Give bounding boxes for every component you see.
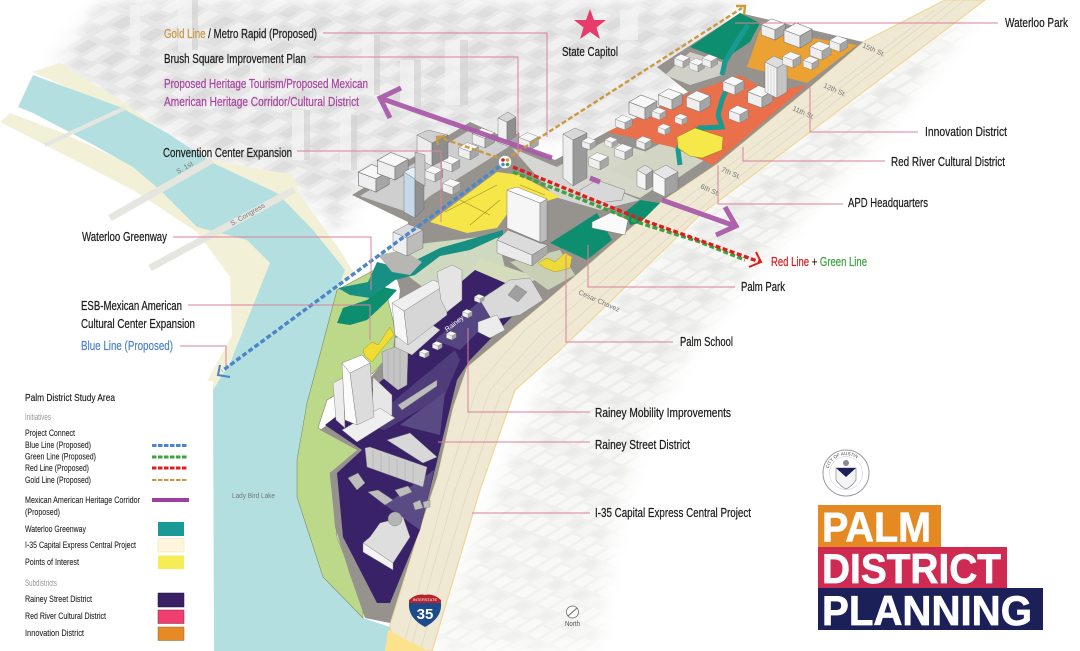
blue tower <box>404 167 424 218</box>
legend: Red River Cultural District: Red River Cultural District <box>25 611 106 622</box>
legend: Red River Cultural District <box>25 610 184 624</box>
icon: Interstate 35 shield: INTERSTATE <box>413 597 437 602</box>
Blue Line route <box>218 166 500 377</box>
street bridges <box>45 108 294 268</box>
Palm School yellow buildings <box>538 253 572 272</box>
legend: heritage corridor: Mexican American Heritage Corridor <box>25 495 140 506</box>
legend: Rainey Street District <box>25 593 184 607</box>
street names: 15th St. <box>861 42 886 59</box>
legend: Waterloo Greenway: Waterloo Greenway <box>25 524 86 535</box>
legend: heritage corridor <box>25 495 189 518</box>
tower group north <box>392 265 462 355</box>
Red Line route <box>513 167 761 267</box>
title line: Planning: PLANNING <box>822 587 1032 634</box>
label: APD Headquarters: APD Headquarters <box>848 196 928 210</box>
label: Proposed Heritage Tourism: Proposed Heritage Tourism/Proposed Mexican <box>164 77 368 91</box>
legend subdistricts heading: Subdistricts <box>25 578 57 589</box>
label: Proposed Heritage Tourism <box>164 77 368 109</box>
street names: 6th St. <box>699 183 721 198</box>
label: ESB-Mexican American Cultural Center Expansion: ESB-Mexican American <box>81 299 182 313</box>
icon: State Capitol star <box>574 9 606 39</box>
Rainey Street District zone <box>325 270 533 603</box>
title: Palm District Planning <box>818 504 1043 634</box>
Waterloo Greenway creek and lakeside <box>337 230 503 325</box>
label: Proposed Heritage Tourism: American Heritage Corridor/Cultural District <box>164 95 359 109</box>
north strip buildings <box>674 54 690 68</box>
Waterloo Greenway creek north <box>678 25 748 165</box>
label: Brush Square Improvement Plan: Brush Square Improvement Plan <box>164 52 306 66</box>
east side street grid <box>436 18 966 650</box>
Innovation tower <box>765 56 787 98</box>
label: ESB-Mexican American Cultural Center Expansion <box>81 299 195 331</box>
label: Gold Line / Metro Rapid: Gold Line / Metro Rapid (Proposed) <box>164 27 317 41</box>
peninsula parkland <box>297 267 397 618</box>
title line: Palm: PALM <box>822 504 931 550</box>
ESB yellow building <box>363 327 394 362</box>
label: State Capitol: State Capitol <box>562 45 618 59</box>
legend: points of interest: Points of Interest <box>25 557 79 568</box>
Rainey buildings <box>333 265 543 570</box>
Waterloo Park north green <box>690 13 760 60</box>
legend: project connect lines: Red Line (Proposed) <box>25 463 89 474</box>
striped tower <box>382 345 408 390</box>
legend: Waterloo Greenway <box>25 522 184 536</box>
Red River Cultural District zone <box>607 75 807 165</box>
legend: project connect lines: Green Line (Proposed) <box>25 452 96 462</box>
street names <box>176 42 886 500</box>
light city blocks <box>360 52 722 300</box>
label: Red River Cultural District: Red River Cultural District <box>891 155 1005 169</box>
legend: Innovation District <box>25 627 184 640</box>
I-35 corridor band <box>390 0 985 651</box>
label: ESB-Mexican American Cultural Center Expansion: Cultural Center Expansion <box>81 317 195 331</box>
street names: S. Congress <box>230 202 267 228</box>
legend: heritage corridor: (Proposed) <box>25 507 60 518</box>
legend: Innovation District: Innovation District <box>25 628 84 639</box>
street names: S. 1st <box>176 161 195 176</box>
street names: 11th St. <box>791 105 816 121</box>
district base road network <box>320 13 863 623</box>
label: Palm Park: Palm Park <box>741 280 786 294</box>
convention tower <box>415 130 448 186</box>
label: Innovation District: Innovation District <box>925 125 1007 139</box>
legend: Rainey Street District: Rainey Street District <box>25 594 92 605</box>
south cluster <box>363 512 410 570</box>
Green Line route <box>513 172 745 260</box>
small building strips <box>348 380 437 510</box>
point of view marker at south edge <box>385 630 428 651</box>
label: Palm School: Palm School <box>680 335 733 349</box>
downtown city context <box>58 0 742 232</box>
tall center tower <box>563 128 587 186</box>
label: Rainey Street District: Rainey Street District <box>595 438 690 452</box>
icon: north marker <box>565 606 580 628</box>
title line: District: DISTRICT <box>822 545 1001 592</box>
riverside building near blue line <box>393 224 423 256</box>
Red River buildings <box>615 115 632 130</box>
transit hub marker <box>498 156 512 168</box>
label: I-35 Capital Express Central Project: I-35 Capital Express Central Project <box>595 506 751 520</box>
legend title: Palm District Study Area <box>25 392 115 404</box>
gray parking lot near greenway <box>378 250 422 275</box>
legend: I-35 project: I-35 Capital Express Central Project <box>25 540 136 551</box>
north yellow points of interest <box>677 128 723 158</box>
label: Blue Line: Blue Line (Proposed) <box>81 339 173 353</box>
street names: Cesar Chavez <box>577 289 621 314</box>
legend: project connect lines: Gold Line (Proposed) <box>25 475 91 486</box>
legend: project connect lines <box>25 428 188 486</box>
Palm School white building <box>592 212 628 235</box>
north block tower <box>498 112 516 142</box>
Waterloo Greenway east green <box>625 200 660 225</box>
Innovation District zone <box>747 30 857 83</box>
Innovation buildings <box>761 19 785 40</box>
Palm Park green <box>550 213 612 260</box>
leader lines <box>173 23 998 513</box>
legend initiatives heading: Initiatives <box>25 412 51 423</box>
large white convention tower <box>497 187 548 266</box>
label: Rainey Mobility Improvements: Rainey Mobility Improvements <box>595 406 731 420</box>
legend: project connect lines: Blue Line (Proposed) <box>25 440 91 451</box>
U building <box>478 278 543 338</box>
Lady Bird Lake banks <box>0 63 355 392</box>
label: Waterloo Greenway: Waterloo Greenway <box>82 230 168 244</box>
Gold Line route <box>437 6 745 160</box>
downtown buildings <box>358 19 848 266</box>
icon: City of Austin seal: CITY OF AUSTIN <box>826 452 858 468</box>
street names: Rainey <box>444 314 466 334</box>
label: Red Line + Green Line: Red Line + Green Line <box>771 255 867 269</box>
label: Convention Center Expansion: Convention Center Expansion <box>163 146 292 160</box>
icon: north marker: North <box>565 621 580 628</box>
icon: Interstate 35 shield <box>409 595 441 627</box>
Mexican American Heritage Corridor arrow <box>380 88 736 235</box>
street names: 7th St. <box>720 166 742 181</box>
tall tower south <box>342 355 374 425</box>
legend: points of interest <box>25 556 184 569</box>
mid block buildings <box>580 180 625 203</box>
Points of interest downtown yellow <box>430 172 560 233</box>
tower south secondary blocks <box>333 377 395 442</box>
silo building <box>365 433 437 487</box>
icon: City of Austin seal <box>822 450 870 496</box>
Lady Bird Lake water <box>18 75 394 651</box>
legend: project connect lines: Project Connect <box>25 428 75 439</box>
street names: Lady Bird Lake <box>232 493 275 500</box>
icon: Interstate 35 shield: 35 <box>417 606 433 623</box>
street names: 12th St. <box>822 82 847 99</box>
panel: legend <box>0 381 213 651</box>
